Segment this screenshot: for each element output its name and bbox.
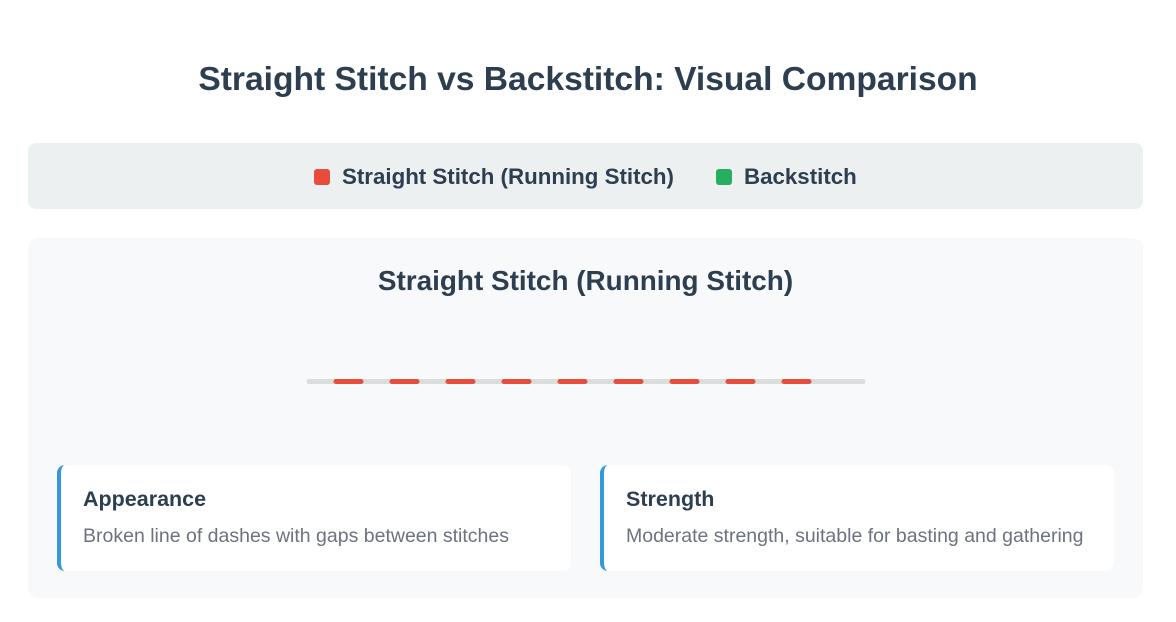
legend	[28, 143, 1143, 209]
title: Straight Stitch vs Backstitch: Visual Comparison	[198, 61, 978, 98]
panel: straight stitch	[28, 238, 1143, 598]
legend item: straight stitch: Straight Stitch (Running Stitch)	[342, 164, 674, 189]
panel heading: Straight Stitch (Running Stitch)	[378, 265, 793, 296]
card: strength	[600, 465, 1114, 571]
card: strength: Moderate strength, suitable for basting and gathering	[626, 525, 1083, 547]
stitch diagram	[306, 379, 866, 384]
card: appearance: Broken line of dashes with gaps between stitches	[83, 525, 509, 547]
card: strength: Strength	[626, 487, 714, 511]
card: appearance: Appearance	[83, 487, 206, 511]
card: appearance	[57, 465, 571, 571]
legend item: backstitch: Backstitch	[744, 164, 857, 189]
